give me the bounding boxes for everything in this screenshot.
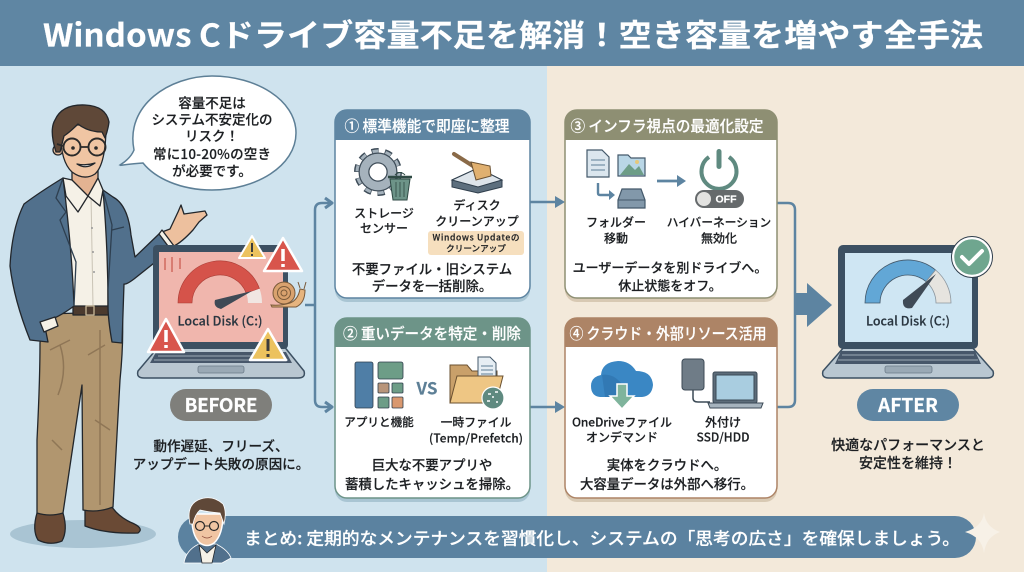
label: BEFORE xyxy=(170,389,272,421)
speech bubble: 常に10-20%の空き xyxy=(153,143,271,163)
icon: warning small yellow xyxy=(239,236,265,258)
label: external SSD HDD xyxy=(696,414,750,446)
text: step 2 description: 巨大な不要アプリや xyxy=(372,454,492,474)
panel heading: ② 重いデータを特定・削除 xyxy=(343,322,521,344)
label: folder move: 移動 xyxy=(604,230,628,246)
title banner: Windows Cドライブ容量不足を解消！空き容量を増やす全手法 xyxy=(43,10,983,56)
icon: warning red lower left xyxy=(148,319,184,352)
laptop: before, slow disk: Local Disk (C:) xyxy=(178,310,262,330)
icon: temp folder xyxy=(450,357,504,409)
label: external SSD HDD: 外付け xyxy=(705,414,741,430)
label: temp files: 一時ファイル xyxy=(441,414,512,430)
callout: Windows Update cleanup: Windows Updateの xyxy=(432,232,520,244)
icon: sparkle xyxy=(965,513,1000,553)
title banner xyxy=(0,0,1024,66)
arrow: big arrow to after xyxy=(796,283,832,327)
callout: Windows Update cleanup xyxy=(428,231,524,255)
icon: cloud download xyxy=(591,361,653,409)
label: disk cleanup xyxy=(435,196,519,230)
panel heading: ③ インフラ視点の最適化設定 xyxy=(570,114,764,136)
panel: step 3 infrastructure optimisation xyxy=(565,110,777,302)
icon: power off toggle: OFF xyxy=(716,194,737,206)
arrow: steps 3 and 4 merge xyxy=(777,203,795,407)
label: AFTER xyxy=(857,389,959,421)
text: step 4 description: 実体をクラウドへ。 xyxy=(607,454,727,474)
icon: summary avatar xyxy=(184,498,231,563)
label: apps and features: アプリと機能 xyxy=(344,414,414,430)
icon: warning yellow lower right xyxy=(250,329,286,360)
icon: external drive and laptop xyxy=(682,359,763,408)
panel: step 1 standard features xyxy=(335,110,530,302)
panel: step 2 heavy data xyxy=(335,318,530,502)
text: step 3 description: 休止状態をオフ。 xyxy=(618,276,722,294)
panel heading: ① 標準機能で即座に整理 xyxy=(344,114,510,136)
text: step 3 description xyxy=(573,258,767,294)
character: presenter in blazer xyxy=(10,105,207,548)
gauge: near full xyxy=(178,261,262,309)
text: step 4 description: 大容量データは外部へ移行。 xyxy=(580,473,754,493)
label: folder move: フォルダー xyxy=(586,214,646,230)
label: hibernation disable xyxy=(667,214,771,246)
text: step 2 description xyxy=(345,454,519,493)
icon: warning large red xyxy=(264,238,302,271)
panel heading xyxy=(335,110,530,140)
text: versus: VS xyxy=(416,374,437,400)
icon: power off toggle xyxy=(695,149,744,208)
label: OneDrive files on demand xyxy=(572,414,672,446)
laptop: before, slow disk xyxy=(138,245,304,378)
laptop: after, healthy disk xyxy=(823,245,993,378)
callout: summary bar xyxy=(178,516,976,558)
icon: green check badge xyxy=(952,236,992,278)
arrow: step 1 to step 3 xyxy=(530,196,565,208)
text: before caption: 動作遅延、フリーズ、 xyxy=(153,435,289,455)
laptop: after, healthy disk: Local Disk (C:) xyxy=(866,310,950,330)
text: before caption xyxy=(133,435,309,473)
speech bubble xyxy=(120,76,296,190)
icon: folder move xyxy=(587,150,645,208)
arrow: move to hibernate off xyxy=(657,175,686,187)
icon: snail xyxy=(271,282,306,307)
speech bubble: システム不安定化の xyxy=(151,108,273,128)
text: step 4 description xyxy=(580,454,754,493)
arrow: before to steps 1 and 2 xyxy=(305,198,332,412)
panel heading: ④ クラウド・外部リソース活用 xyxy=(570,322,766,344)
label: disk cleanup: クリーンアップ xyxy=(435,212,519,230)
text: step 2 description: 蓄積したキャッシュを掃除。 xyxy=(345,473,519,493)
text: step 1 description xyxy=(352,258,512,295)
label: hibernation disable: ハイバーネーション xyxy=(667,214,771,230)
label: OneDrive files on demand: オンデマンド xyxy=(586,428,658,446)
speech bubble: リスク！ xyxy=(185,125,239,145)
label: external SSD HDD: SSD/HDD xyxy=(696,428,750,446)
speech bubble: 容量不足は xyxy=(178,92,246,112)
text: after caption xyxy=(831,435,985,473)
text: before caption: アップデート失敗の原因に。 xyxy=(133,453,309,473)
callout: Windows Update cleanup: クリーンアップ xyxy=(446,242,506,254)
callout: summary bar: まとめ: 定期的なメンテナンスを習慣化し、システムの「思考の広さ」を確保しましょう。 xyxy=(244,524,960,550)
icon: broom on disk xyxy=(452,154,502,193)
text: after caption: 安定性を維持！ xyxy=(859,453,957,473)
text: step 1 description: 不要ファイル・旧システム xyxy=(352,258,512,278)
icon: gear with trash xyxy=(357,151,412,200)
gauge: free space xyxy=(865,260,951,308)
speech bubble: が必要です。 xyxy=(172,160,252,180)
label: storage sense: センサー xyxy=(360,220,408,236)
label: storage sense xyxy=(354,204,414,236)
arrow: step 2 to step 4 xyxy=(530,401,565,413)
text: step 3 description: ユーザーデータを別ドライブへ。 xyxy=(573,258,767,276)
icon: apps and features tiles xyxy=(355,362,403,408)
label: BEFORE: BEFORE xyxy=(184,391,258,418)
label: storage sense: ストレージ xyxy=(354,204,414,222)
label: temp files xyxy=(429,414,523,446)
text: step 1 description: データを一括削除。 xyxy=(372,275,492,295)
label: disk cleanup: ディスク xyxy=(453,196,501,214)
text: after caption: 快適なパフォーマンスと xyxy=(831,435,985,455)
label: AFTER: AFTER xyxy=(877,391,938,418)
label: temp files: (Temp/Prefetch) xyxy=(429,430,523,446)
panel: step 4 cloud and external xyxy=(565,318,777,502)
label: OneDrive files on demand: OneDriveファイル xyxy=(572,414,672,430)
label: hibernation disable: 無効化 xyxy=(701,230,737,246)
label: folder move xyxy=(586,214,646,246)
